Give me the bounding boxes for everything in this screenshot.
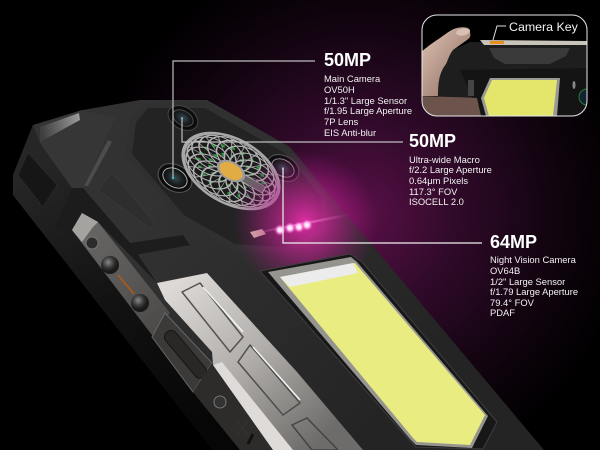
- side round button lower: [131, 294, 149, 312]
- specs: 1/2" Large Sensor: [490, 276, 565, 287]
- inset border: [422, 15, 587, 116]
- bumper ridge: [84, 140, 112, 186]
- phone: [13, 100, 544, 450]
- inset yellow panel: [484, 80, 557, 116]
- orange link: [118, 275, 134, 294]
- inset green fan: [578, 88, 586, 106]
- side recess: [98, 172, 155, 229]
- inset background: [422, 15, 587, 116]
- heading: 50MP: [324, 50, 371, 70]
- specs: f/1.95 Large Aperture: [324, 105, 412, 116]
- plate slot 2: [238, 345, 300, 415]
- flash: [250, 229, 266, 238]
- camera module: [125, 102, 327, 253]
- specs: OV50H: [324, 84, 355, 95]
- recycle mark: [237, 420, 248, 435]
- led bar: [274, 219, 313, 236]
- specs: 7P Lens: [324, 116, 359, 127]
- text: ultra-wide macro: [409, 131, 492, 207]
- callout line: main camera: [173, 61, 315, 177]
- camera key label: Camera Key: [509, 20, 579, 34]
- specs: 0.64μm Pixels: [409, 175, 468, 186]
- screw: [86, 237, 98, 249]
- key slot: [162, 328, 209, 381]
- specs: Main Camera: [324, 73, 380, 84]
- black mark: [248, 434, 253, 444]
- inset yellow rim: [481, 78, 560, 116]
- lens right: [262, 149, 304, 187]
- yellow panel: [280, 263, 485, 445]
- inset photo: [420, 27, 595, 116]
- gold hub: [215, 157, 247, 185]
- fan spokes: [191, 136, 271, 206]
- lens left: [153, 158, 197, 198]
- phone body: [13, 100, 544, 450]
- inset hand finger: [420, 27, 470, 96]
- white band: [213, 362, 293, 450]
- lower screw: [214, 396, 226, 408]
- specs: f/1.79 Large Aperture: [490, 286, 578, 297]
- white led strip: [280, 263, 358, 287]
- inset top silver edge: [480, 40, 590, 45]
- inset top plates: [489, 48, 570, 64]
- specs: 79.4° FOV: [490, 297, 535, 308]
- fan bar: [238, 173, 266, 193]
- inset hand thumb: [420, 96, 481, 116]
- specs: Ultra-wide Macro: [409, 154, 480, 165]
- inset fingernail: [456, 28, 470, 36]
- lamp metal rim: [268, 257, 488, 448]
- slot highlights: [203, 287, 300, 400]
- specs: EIS Anti-blur: [324, 127, 376, 138]
- lower shoulder band: [130, 235, 190, 255]
- plate slot 3: [292, 418, 338, 450]
- specs: PDAF: [490, 307, 515, 318]
- speaker grille: [18, 153, 57, 207]
- strip light corner: [72, 213, 98, 242]
- magenta glow: [230, 150, 380, 295]
- specs: Night Vision Camera: [490, 254, 576, 265]
- specs: ISOCELL 2.0: [409, 196, 464, 207]
- upper corner bumper: [40, 110, 115, 188]
- side metal strip: [72, 213, 170, 335]
- text: night vision: [490, 232, 578, 318]
- specs: 1/1.3" Large Sensor: [324, 95, 407, 106]
- module inner: [132, 108, 321, 247]
- green lights: [190, 135, 272, 207]
- specs: f/2.2 Large Aperture: [409, 164, 492, 175]
- inset side dot: [572, 81, 576, 89]
- bumper highlight: [40, 113, 80, 142]
- specs: 117.3° FOV: [409, 186, 458, 197]
- inset lower panel: [460, 68, 590, 116]
- fan blades: [174, 121, 288, 221]
- plate slot 1: [182, 283, 243, 352]
- side face: [13, 125, 240, 450]
- camera key pointer: [493, 26, 506, 40]
- lower dark side strip: [193, 363, 273, 450]
- dark gap under bumper: [53, 188, 157, 283]
- side power key: [152, 313, 212, 392]
- light streak: [250, 213, 350, 235]
- lens top: [164, 100, 202, 136]
- inset camera key: [490, 41, 504, 44]
- text: main camera: [324, 50, 412, 138]
- inset: camera key: [420, 15, 595, 116]
- callout line: macro camera: [182, 118, 403, 142]
- lamp frame: [260, 254, 497, 449]
- callout line: night vision camera: [283, 168, 482, 243]
- side round button upper: [101, 256, 119, 274]
- silver plate: [157, 273, 363, 450]
- cooling fan: [170, 118, 292, 224]
- heading: 64MP: [490, 232, 537, 252]
- specs: OV64B: [490, 265, 520, 276]
- inset phone body: [438, 42, 586, 98]
- inset slot: [468, 80, 474, 96]
- fan rim: [170, 118, 292, 224]
- heading: 50MP: [409, 131, 456, 151]
